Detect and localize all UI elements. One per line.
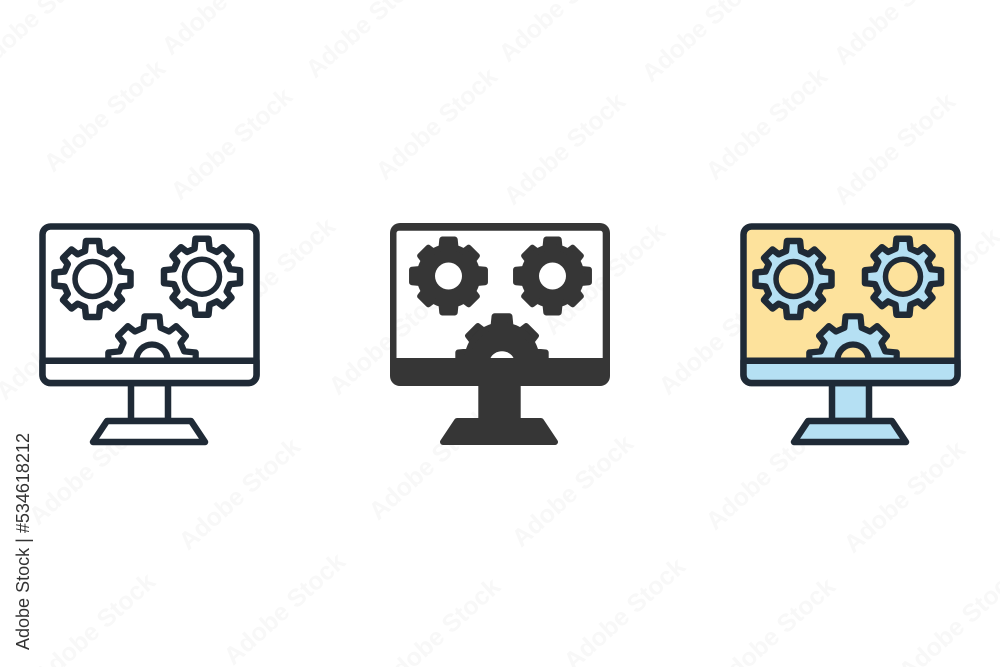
background watermark: Adobe Stock (24, 407, 156, 531)
background watermark: Adobe Stock (539, 217, 671, 341)
background watermark: Adobe Stock (654, 277, 786, 401)
monitor stand (832, 383, 869, 421)
background watermark: Adobe Stock (219, 547, 351, 667)
gear bottom centre (105, 313, 199, 358)
stock id caption: Adobe Stock | #534618212 (13, 433, 33, 650)
monitor base (443, 421, 555, 442)
icon: solid monitor with gears (390, 223, 610, 442)
monitor chin bar (42, 361, 256, 383)
gear bottom centre (806, 313, 900, 358)
icon: coloured monitor with gears (744, 226, 958, 442)
gear hole right (539, 262, 566, 290)
solid gear left (412, 240, 485, 312)
background watermark: Adobe Stock (839, 435, 971, 559)
gear hole left (435, 262, 462, 290)
monitor stand (478, 385, 521, 420)
monitor body (390, 223, 610, 386)
solid gear bottom (455, 313, 549, 358)
monitor screen (744, 226, 958, 383)
gear top right (865, 239, 941, 315)
monitor stand (131, 383, 168, 421)
background watermark: Adobe Stock (829, 87, 961, 211)
monitor base (93, 421, 205, 442)
solid gear right (516, 240, 589, 312)
gear top right (164, 239, 240, 315)
monitor chin bar (744, 361, 958, 383)
monitor base (794, 421, 906, 442)
infographic canvas (16, 223, 961, 650)
background watermark: Adobe Stock (39, 54, 171, 178)
background watermark: Adobe Stock (499, 87, 631, 211)
gear top left (756, 241, 832, 317)
background watermark: Adobe Stock (324, 277, 456, 401)
background watermark: Adobe Stock (209, 212, 341, 336)
background watermark: Adobe Stock (701, 412, 833, 536)
gear hole bottom (490, 351, 514, 358)
monitor screen (42, 226, 256, 383)
background watermark: Adobe Stock (371, 62, 503, 186)
icon: outline monitor with gears (42, 226, 256, 442)
background watermark: Adobe Stock (166, 82, 298, 206)
background watermark: Adobe Stock (507, 429, 639, 553)
gear top left (54, 241, 130, 317)
background watermark: Adobe Stock (174, 432, 306, 556)
background watermark: Adobe Stock (701, 62, 833, 186)
background watermark: Adobe Stock (364, 402, 496, 526)
